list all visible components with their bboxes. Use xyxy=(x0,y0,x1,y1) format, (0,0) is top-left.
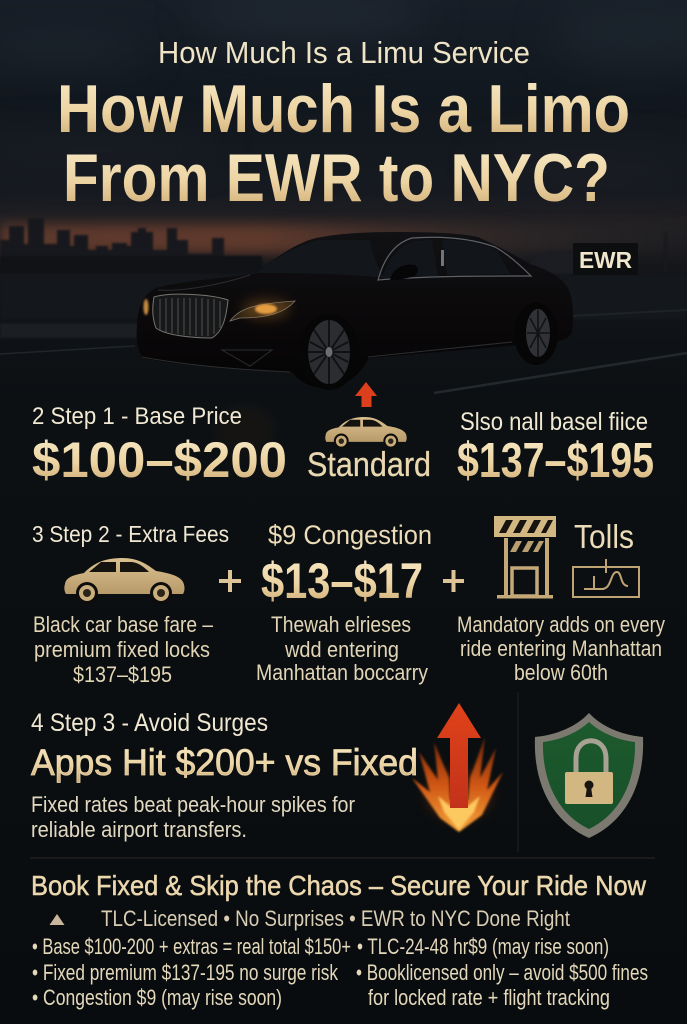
subtitle: How Much Is a Limu Service xyxy=(158,35,530,70)
rear wheel xyxy=(514,303,558,365)
plus sign xyxy=(443,570,464,592)
caption: congestion: Thewah elrieses xyxy=(271,612,411,637)
caption: congestion: Manhattan boccarry xyxy=(256,660,428,685)
caption: congestion xyxy=(256,612,428,685)
caption: tolls: below 60th xyxy=(514,660,608,685)
title: From EWR to NYC? xyxy=(63,140,610,216)
step 3 description xyxy=(31,792,355,842)
grille xyxy=(153,294,228,338)
bullets: left column xyxy=(32,934,351,1010)
step 3 description: Fixed rates beat peak-hour spikes for xyxy=(31,792,355,817)
icon: flames xyxy=(412,737,503,832)
limousine photo xyxy=(137,232,573,390)
headlights xyxy=(144,299,295,321)
label: standard: Standard xyxy=(307,446,431,484)
icon: toll booth with barrier xyxy=(494,516,556,598)
congestion label: $9 Congestion xyxy=(268,520,432,550)
plus sign xyxy=(219,570,241,592)
bullets: right column xyxy=(356,934,648,1010)
icon: shield with padlock xyxy=(535,713,643,838)
city skyline xyxy=(0,218,667,276)
label: premium base fare: Slso nall basel fiice xyxy=(460,408,648,436)
step 3 heading: 4 Step 3 - Avoid Surges xyxy=(31,709,268,737)
trust line: TLC-Licensed • No Surprises • EWR to NYC Done Right xyxy=(101,906,570,931)
side mirror xyxy=(390,265,418,280)
title xyxy=(57,71,630,216)
bullets: left column: • Congestion $9 (may rise soon) xyxy=(32,985,282,1010)
caption: tolls xyxy=(457,612,665,685)
bullets: right column: • TLC-24-48 hr$9 (may rise soon) xyxy=(357,934,609,959)
padlock xyxy=(565,741,613,804)
EWR sign xyxy=(573,243,638,275)
toll price: $13–$17 xyxy=(261,553,423,609)
bullets: left column: • Base $100-200 + extras = real total $150+ xyxy=(32,934,351,959)
car windows xyxy=(256,237,531,280)
EWR sign: EWR xyxy=(579,247,632,273)
red arrow pointing up xyxy=(355,382,377,407)
icon: red surge arrow xyxy=(437,703,481,808)
front wheel xyxy=(299,314,359,390)
caption: black car base fare xyxy=(33,612,214,687)
caption: black car base fare: premium fixed locks xyxy=(34,637,210,662)
bullets: left column: • Fixed premium $137-195 no surge risk xyxy=(32,960,339,985)
step 3 price headline: Apps Hit $200+ vs Fixed xyxy=(31,742,418,783)
road stripe xyxy=(434,353,687,393)
icon: large car xyxy=(64,558,184,604)
caption: black car base fare: Black car base fare – xyxy=(33,612,214,637)
caption: congestion: wdd entering xyxy=(284,637,399,662)
icon: triangle xyxy=(50,914,64,925)
step 3 description: reliable airport transfers. xyxy=(31,817,247,842)
bullets: right column: for locked rate + flight tracking xyxy=(368,985,610,1010)
caption: tolls: ride entering Manhattan xyxy=(460,636,662,661)
icon: toll sign xyxy=(573,559,639,597)
step 2 heading: 3 Step 2 - Extra Fees xyxy=(32,521,229,547)
caption: black car base fare: $137–$195 xyxy=(73,662,172,687)
tolls label: Tolls xyxy=(574,518,634,555)
standard price: $100–$200 xyxy=(32,432,287,488)
step 1 heading: 2 Step 1 - Base Price xyxy=(32,403,242,430)
icon: small car xyxy=(325,417,407,449)
